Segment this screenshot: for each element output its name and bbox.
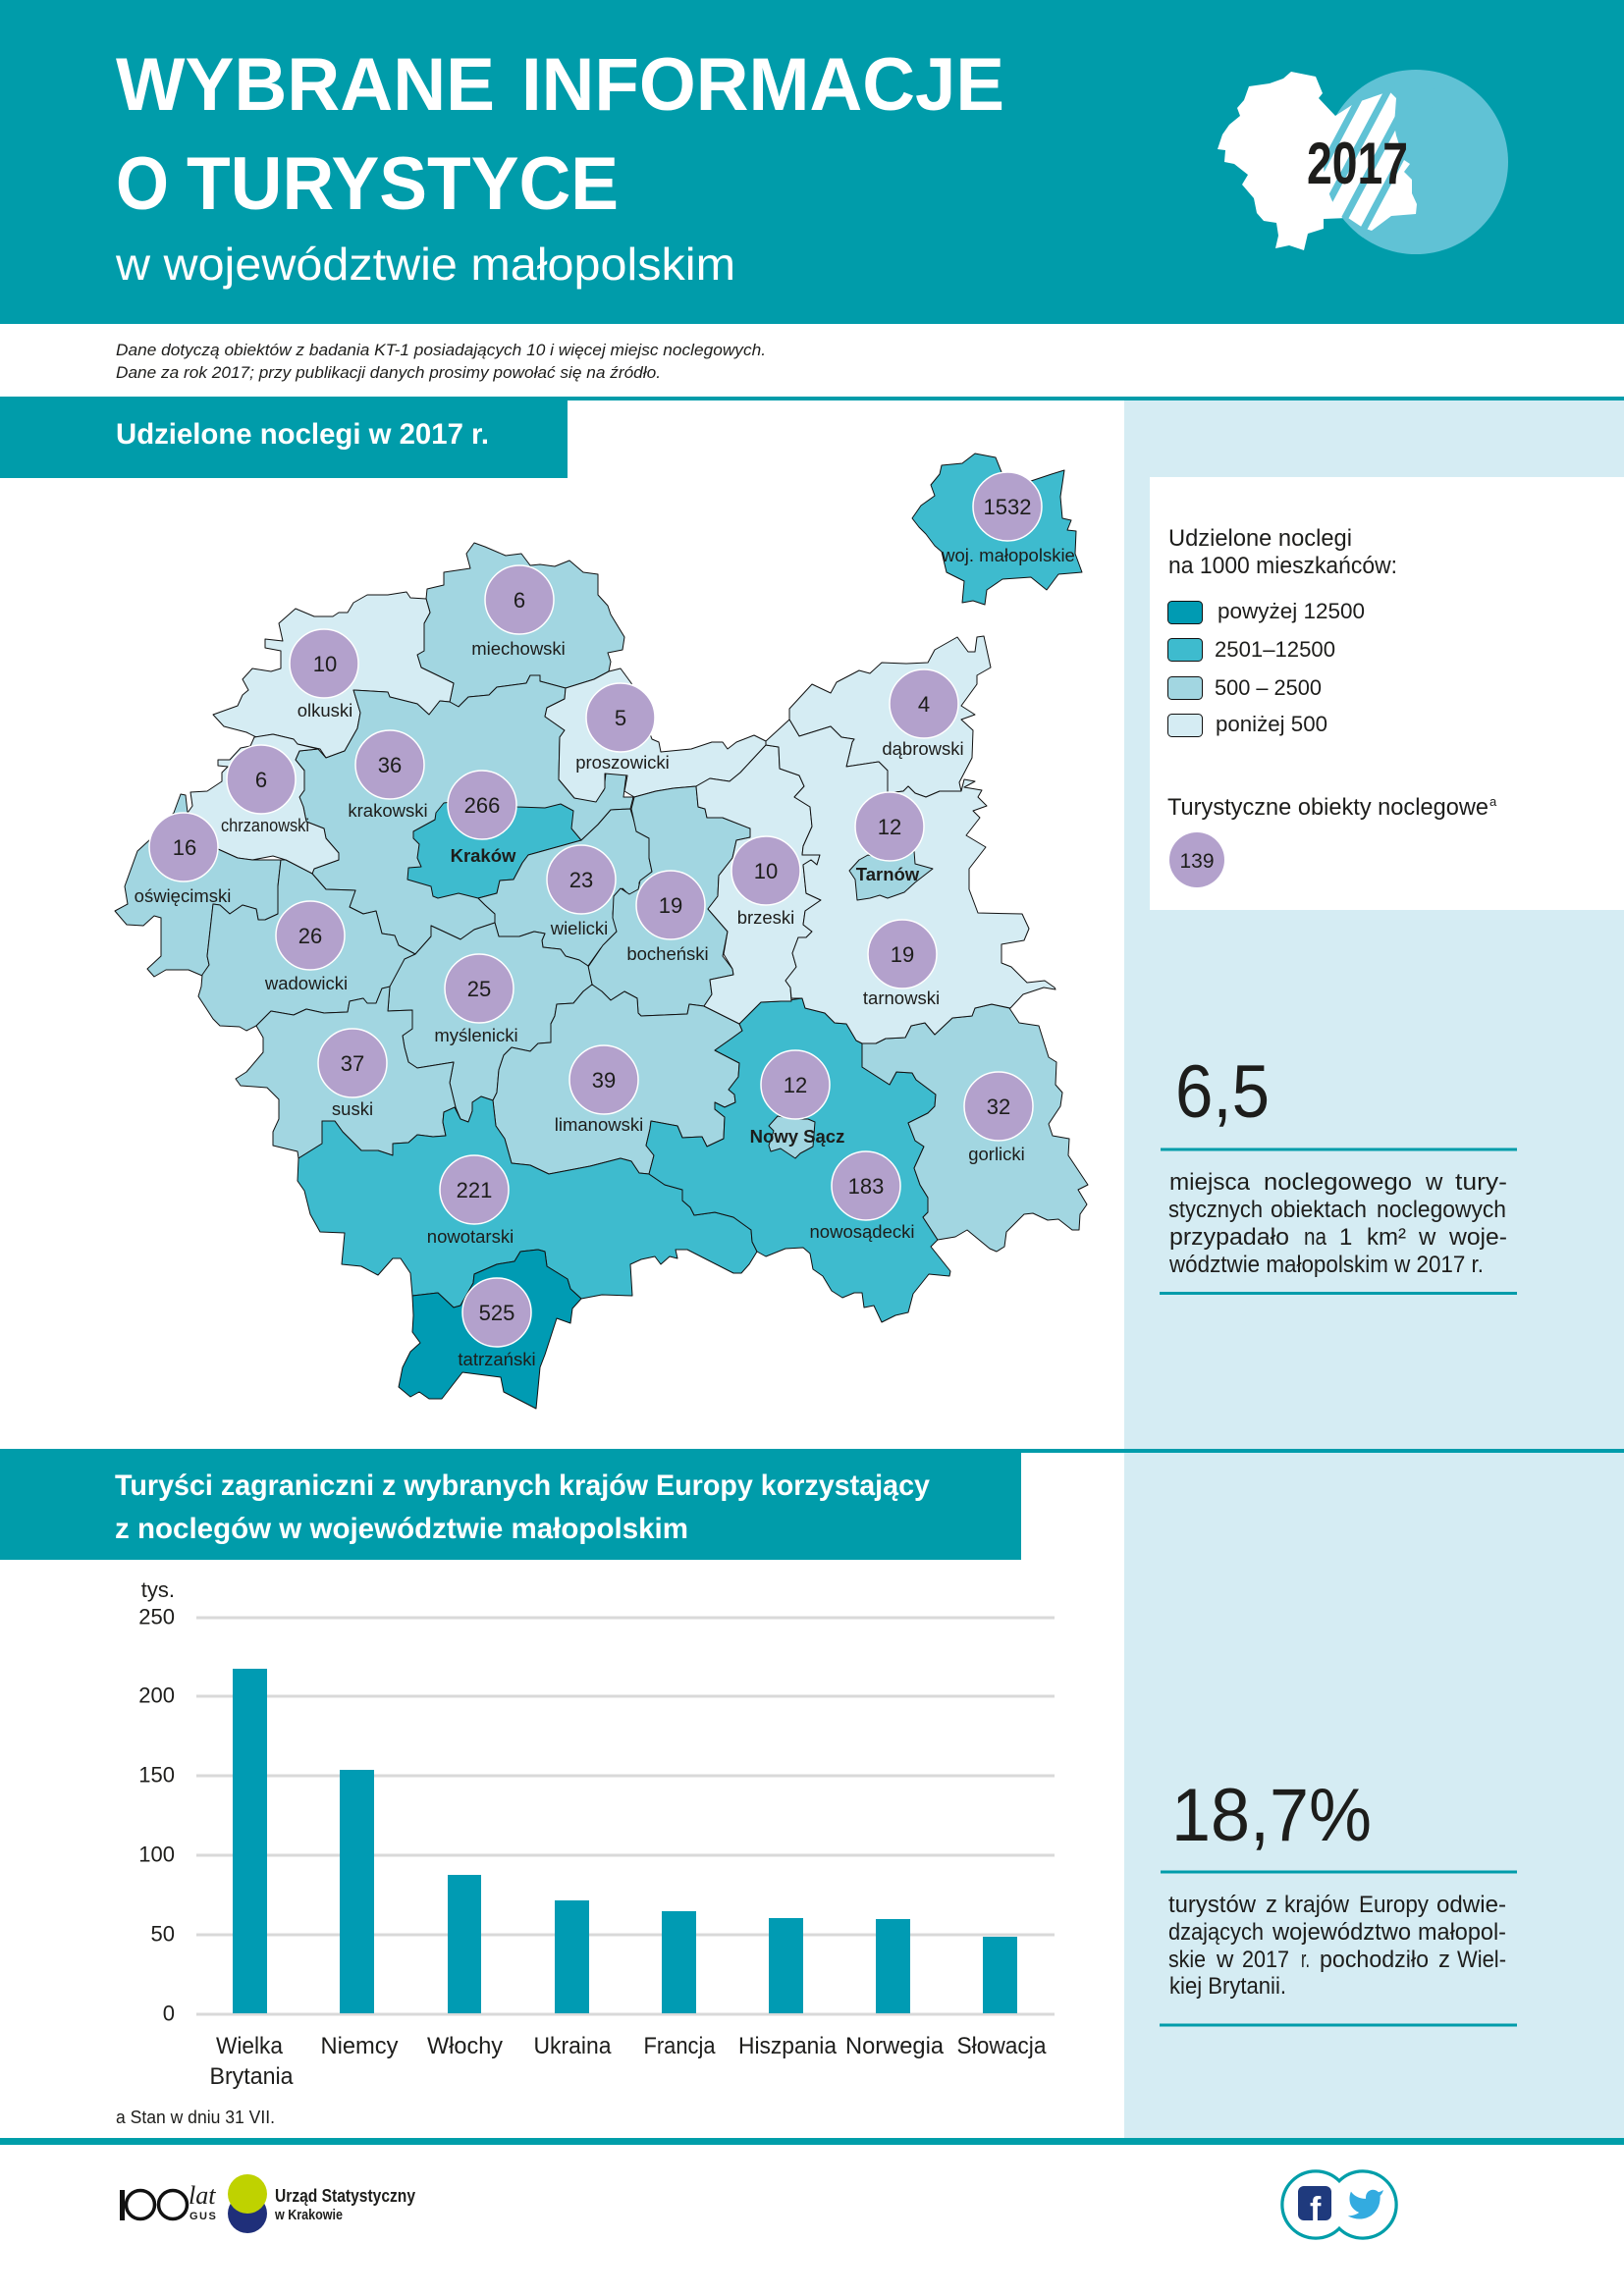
footer rule (0, 2138, 1624, 2145)
bubble: proszowicki: proszowicki (575, 752, 670, 773)
bubble: dąbrowski (882, 669, 964, 759)
bubble: limanowski: limanowski (555, 1114, 643, 1135)
country labels: Ukraina (534, 2033, 612, 2059)
icons: social media facebook and twitter (1282, 2171, 1396, 2238)
icon: facebook: f (1310, 2191, 1322, 2228)
bubble: gorlicki: 32 (987, 1095, 1010, 1119)
bubble: Tarnów: Tarnów (856, 864, 920, 884)
legend items: poniżej 500 (1216, 712, 1327, 736)
bubble: proszowicki: 5 (615, 706, 626, 730)
logo: 100 lat GUS: lat (189, 2181, 216, 2210)
bubble: nowosądecki: nowosądecki (810, 1221, 914, 1242)
bar chart: foreign tourists by country (138, 1577, 1055, 2090)
description: 1 (1339, 1224, 1352, 1251)
legend title: Udzielone noclegi (1168, 525, 1352, 552)
description: na (1304, 1224, 1327, 1251)
heading: foreign tourists: Turyści zagraniczni z wybranych krajów Europy korzystający (115, 1469, 930, 1502)
region: proszowicki (545, 668, 766, 802)
region: myślenicki (388, 923, 592, 1122)
country labels: Francja (644, 2033, 716, 2059)
bubble: tatrzański: tatrzański (458, 1349, 536, 1369)
subtitle: w województwie małopolskim (115, 239, 735, 290)
bubble: nowotarski: nowotarski (427, 1226, 514, 1247)
bubble: bocheński: bocheński (626, 943, 709, 964)
region: suski (236, 987, 456, 1158)
bubble: tarnowski: 19 (891, 942, 914, 967)
title: TURYSTYCE (187, 142, 619, 226)
description: r. (1301, 1947, 1310, 1973)
country labels: Włochy (427, 2033, 503, 2059)
grid lines and axis labels: 250 (138, 1604, 175, 1629)
country labels: Niemcy (320, 2033, 399, 2059)
legend: accommodation facilities (1167, 794, 1497, 887)
bars (233, 1669, 1017, 2013)
description: w (1418, 1224, 1436, 1251)
bubble: Kraków (448, 771, 516, 866)
bubble: Tarnów: 12 (878, 815, 901, 839)
bubble: suski: 37 (341, 1051, 364, 1076)
bubble: nowosądecki (810, 1151, 914, 1242)
logo: 100 lat GUS: GUS (189, 2211, 217, 2222)
region: olkuski (213, 592, 454, 758)
bubble: nowotarski (427, 1155, 514, 1247)
legend items: powyżej 12500 (1218, 599, 1365, 623)
country labels: Wielka (216, 2033, 284, 2059)
big number: 6,5 (1175, 1050, 1270, 1134)
bubble: chrzanowski: 6 (255, 768, 267, 792)
legend: accommodation facilities: Turystyczne obiekty noclegowe (1167, 794, 1489, 821)
bubble: Tarnów (855, 792, 924, 884)
bubble: nowosądecki: 183 (848, 1174, 884, 1199)
bubble: oświęcimski: oświęcimski (135, 885, 231, 906)
bubble: krakowski: krakowski (348, 800, 428, 821)
legend items: 500 – 2500 (1215, 675, 1322, 700)
region: tarnowski (766, 720, 1056, 1043)
legend title (1168, 525, 1397, 579)
map value bubbles and county labels (135, 472, 1075, 1369)
heading: nights provided: Udzielone noclegi w 2017 r. (116, 418, 489, 451)
bubble: myślenicki (434, 954, 518, 1045)
stat callout: 18,7% (1160, 1774, 1517, 2026)
country labels: Brytania (210, 2063, 294, 2090)
description: z (1266, 1892, 1277, 1918)
region: oświęcimski (115, 794, 281, 977)
bubble: wielicki: 23 (569, 868, 593, 892)
description: stycznych (1168, 1197, 1263, 1223)
bubble: wadowicki: wadowicki (264, 973, 348, 993)
region: chrzanowski (185, 734, 339, 874)
bubble: Nowy Sącz (750, 1050, 844, 1147)
bubble: Kraków: 266 (464, 793, 500, 818)
description: Europy (1359, 1892, 1429, 1918)
bubble: woj. małopolskie (941, 472, 1075, 565)
country labels: Hiszpania (738, 2033, 838, 2059)
country labels: Norwegia (845, 2033, 945, 2059)
bubble: tarnowski: tarnowski (863, 988, 940, 1008)
description: kiej Brytanii. (1169, 1973, 1286, 2000)
description: dzających (1168, 1919, 1264, 1946)
description: przypadało (1169, 1224, 1289, 1251)
description: krajów (1284, 1892, 1350, 1918)
heading: nights provided (0, 400, 568, 478)
grid lines and axis labels: 100 (138, 1842, 175, 1867)
grid lines and axis labels: 0 (163, 2001, 175, 2026)
bubble: miechowski: miechowski (471, 638, 566, 659)
bubble: tarnowski (863, 920, 940, 1008)
bubble: bocheński (626, 871, 709, 964)
bubble: nowotarski: 221 (457, 1178, 492, 1202)
description: km² (1367, 1224, 1406, 1251)
bubble: woj. małopolskie: 1532 (984, 495, 1031, 519)
bubble: dąbrowski: dąbrowski (882, 738, 964, 759)
description (1168, 1892, 1506, 2000)
logo: Urząd Statystyczny w Krakowie (228, 2174, 415, 2233)
description: pochodziło (1320, 1947, 1429, 1973)
logo: 100 lat GUS (120, 2181, 217, 2222)
region: krakowski (296, 675, 633, 954)
bubble: limanowski (555, 1045, 643, 1135)
icon: region silhouette with year 2017 (1218, 70, 1508, 254)
bubble: suski (318, 1029, 387, 1119)
heading: foreign tourists: z noclegów w województwie małopolskim (115, 1513, 688, 1545)
grid lines and axis labels: 150 (138, 1763, 175, 1787)
legend items: 2501–12500 (1215, 637, 1335, 662)
region: wielicki (478, 809, 652, 966)
bubble: krakowski (348, 730, 428, 821)
region: miechowski (417, 543, 624, 707)
grid lines and axis labels: 50 (151, 1922, 175, 1946)
region: nowosądecki (646, 998, 950, 1322)
bubble: krakowski: 36 (378, 753, 402, 777)
bubble: olkuski (290, 629, 358, 721)
region: limanowski (493, 985, 742, 1174)
title: INFORMACJE (521, 43, 1004, 127)
legend: accommodation facilities: 139 (1179, 850, 1215, 873)
bubble: wielicki (547, 845, 616, 938)
bubble: chrzanowski: chrzanowski (221, 815, 309, 835)
bubble: woj. małopolskie: woj. małopolskie (941, 545, 1075, 565)
description: skie (1168, 1947, 1206, 1973)
bubble: wadowicki: 26 (298, 924, 322, 948)
grid lines and axis labels: 200 (138, 1682, 175, 1708)
description: w (1216, 1947, 1234, 1973)
description: obiektach (1271, 1197, 1367, 1223)
logo: Urząd Statystyczny w Krakowie: Urząd Statystyczny (275, 2186, 415, 2206)
bubble: olkuski: olkuski (298, 700, 352, 721)
bubble: olkuski: 10 (313, 652, 337, 676)
bubble: chrzanowski (221, 745, 309, 835)
bubble: miechowski: 6 (514, 588, 525, 613)
choropleth map of counties (115, 454, 1088, 1409)
description: noclegowych (1377, 1197, 1506, 1223)
description: województwo (1272, 1919, 1411, 1946)
heading: foreign tourists (0, 1449, 1624, 1560)
legend: accommodation facilities: a (1489, 794, 1497, 809)
grid lines and axis labels (138, 1604, 1055, 2026)
region: Kraków (407, 802, 581, 898)
title: O (116, 142, 169, 226)
bubble: gorlicki (964, 1072, 1033, 1164)
bubble: wadowicki (264, 901, 348, 993)
region: wadowicki (198, 860, 415, 1031)
description: Wiel- (1457, 1947, 1506, 1973)
description: z (1438, 1947, 1450, 1973)
description: miejsca (1169, 1169, 1251, 1196)
region: Tarnów (849, 851, 933, 900)
right side panel background (1124, 400, 1624, 2138)
region: dąbrowski (789, 636, 991, 797)
bubble: proszowicki (575, 683, 670, 773)
region: brzeski (696, 745, 821, 1024)
description: wództwie małopolskim w 2017 r. (1168, 1252, 1484, 1278)
data note: Dane za rok 2017; przy publikacji danych prosimy powołać się na źródło. (116, 363, 661, 382)
description: odwie- (1436, 1892, 1506, 1918)
bubble: tatrzański: 525 (479, 1301, 514, 1325)
region: Nowy Sącz (769, 1116, 815, 1158)
description: małopol- (1418, 1919, 1506, 1946)
logo: Urząd Statystyczny w Krakowie: w Krakowie (274, 2207, 343, 2223)
bubble: bocheński: 19 (659, 893, 682, 918)
data note: Dane dotyczą obiektów z badania KT-1 posiadających 10 i więcej miejsc noclegowych. (116, 341, 766, 359)
bubble: wielicki: wielicki (550, 918, 608, 938)
panel: map legend (1150, 477, 1624, 910)
bubble: brzeski (731, 836, 800, 928)
description: turystów (1168, 1892, 1257, 1918)
bubble: Kraków: Kraków (451, 845, 516, 866)
title (116, 43, 1004, 226)
bubble: myślenicki: 25 (467, 977, 491, 1001)
stat callout: 6,5 (1160, 1050, 1517, 1295)
data note (116, 341, 766, 382)
title: WYBRANE (116, 43, 495, 127)
region: nowotarski (298, 1096, 757, 1308)
bubble: suski: suski (332, 1098, 373, 1119)
bubble: Nowy Sącz: Nowy Sącz (750, 1126, 844, 1147)
description: woje- (1448, 1224, 1507, 1251)
region: woj. małopolskie inset (912, 454, 1082, 605)
icon: twitter (1348, 2190, 1383, 2219)
country labels: Słowacja (956, 2033, 1047, 2059)
bubble: tatrzański (458, 1278, 536, 1369)
country labels (210, 2033, 1047, 2090)
bubble: Nowy Sącz: 12 (784, 1073, 807, 1097)
header banner (0, 0, 1624, 324)
legend title: na 1000 mieszkańców: (1168, 553, 1397, 579)
footnote: a Stan w dniu 31 VII. (116, 2108, 275, 2127)
legend items (1168, 599, 1365, 736)
bubble: limanowski: 39 (592, 1068, 616, 1093)
axis unit: tys. (141, 1577, 175, 1602)
bubble: miechowski (471, 565, 566, 659)
bubble: gorlicki: gorlicki (968, 1144, 1025, 1164)
region: bocheński (588, 786, 750, 1016)
bubble: myślenicki: myślenicki (434, 1025, 518, 1045)
bubble: oświęcimski (135, 813, 231, 906)
bubble: brzeski: 10 (754, 859, 778, 883)
region: tatrzański (399, 1250, 581, 1409)
description: tury- (1455, 1169, 1507, 1196)
region: gorlicki (862, 1004, 1088, 1252)
bubble: oświęcimski: 16 (173, 835, 196, 860)
icon: region silhouette with year 2017: 2017 (1307, 131, 1408, 196)
description: w (1425, 1169, 1443, 1196)
description: 2017 (1242, 1947, 1289, 1973)
big number: 18,7% (1171, 1774, 1372, 1857)
bubble: dąbrowski: 4 (918, 692, 930, 717)
description (1168, 1169, 1507, 1278)
bubble: brzeski: brzeski (737, 907, 794, 928)
description: noclegowego (1264, 1169, 1412, 1196)
